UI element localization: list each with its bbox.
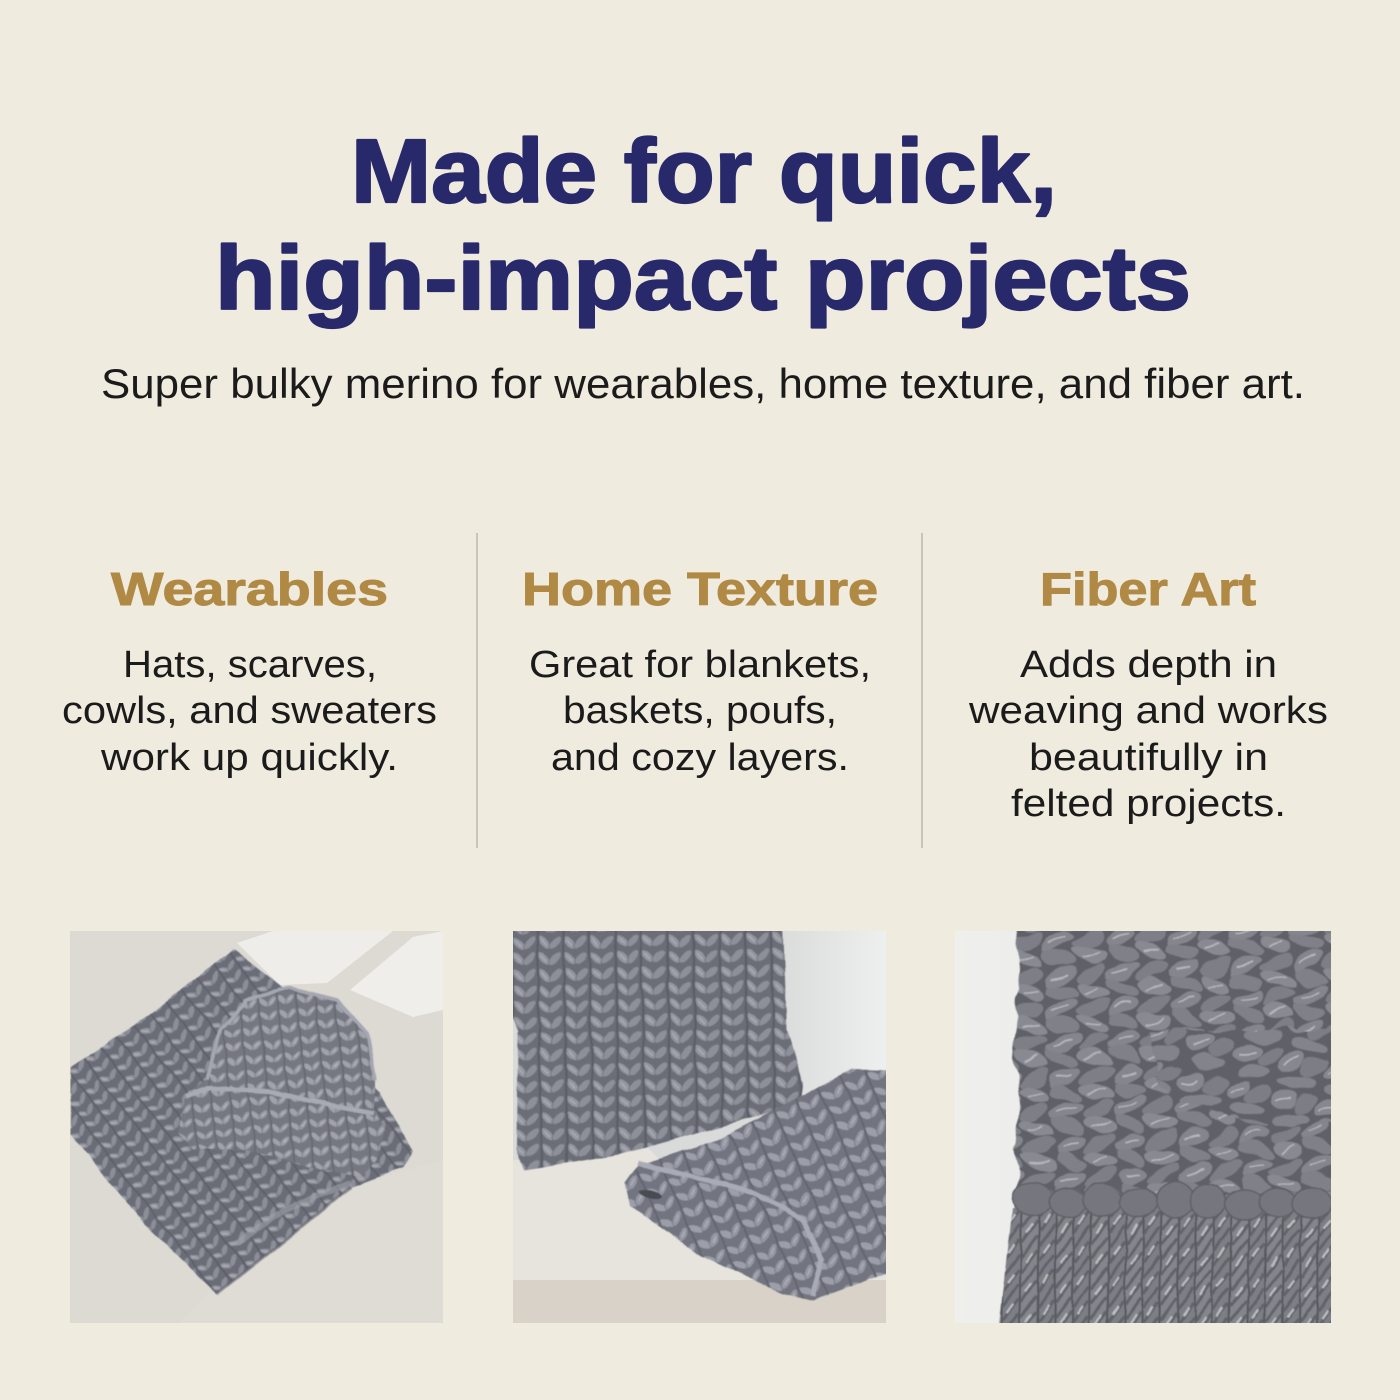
hat	[178, 988, 384, 1177]
column: wearables	[62, 563, 437, 779]
text: home texture description: and cozy layers.	[551, 737, 849, 779]
title	[215, 122, 1191, 329]
text: fiber art description: felted projects.	[1011, 783, 1286, 825]
pillow	[505, 925, 803, 1170]
title: Made for quick,	[351, 122, 1057, 222]
text: fiber art description: beautifully in	[1029, 737, 1268, 779]
heading: fiber art: Fiber Art	[1040, 563, 1256, 615]
subtitle: Super bulky merino for wearables, home texture, and fiber art.	[101, 360, 1305, 407]
text: fiber art description: Adds depth in	[1020, 644, 1277, 686]
text: wearables description: work up quickly.	[100, 737, 398, 779]
text: wearables description: cowls, and sweaters	[62, 690, 437, 732]
fringe knots	[1013, 1181, 1332, 1220]
photo: knit pillow and folded blanket	[505, 925, 900, 1323]
heading: wearables: Wearables	[111, 563, 388, 615]
text: fiber art description: weaving and works	[968, 690, 1328, 732]
woven panel	[1014, 921, 1345, 1215]
title: high-impact projects	[215, 229, 1191, 329]
column: home texture	[522, 563, 878, 779]
text: home texture description	[529, 644, 871, 779]
text: wearables description: Hats, scarves,	[123, 644, 377, 686]
text: home texture description: Great for blankets,	[529, 644, 871, 686]
text: fiber art description	[968, 644, 1328, 825]
cowl	[70, 948, 413, 1294]
text: home texture description: baskets, poufs,	[563, 690, 837, 732]
fringe	[998, 1208, 1331, 1323]
text: wearables description	[62, 644, 437, 779]
column: fiber art	[968, 563, 1328, 825]
photo: knit cowl and hat	[70, 931, 443, 1323]
blanket	[625, 1069, 900, 1301]
photo: woven fiber art with fringe	[955, 921, 1345, 1335]
heading: home texture: Home Texture	[522, 563, 878, 615]
